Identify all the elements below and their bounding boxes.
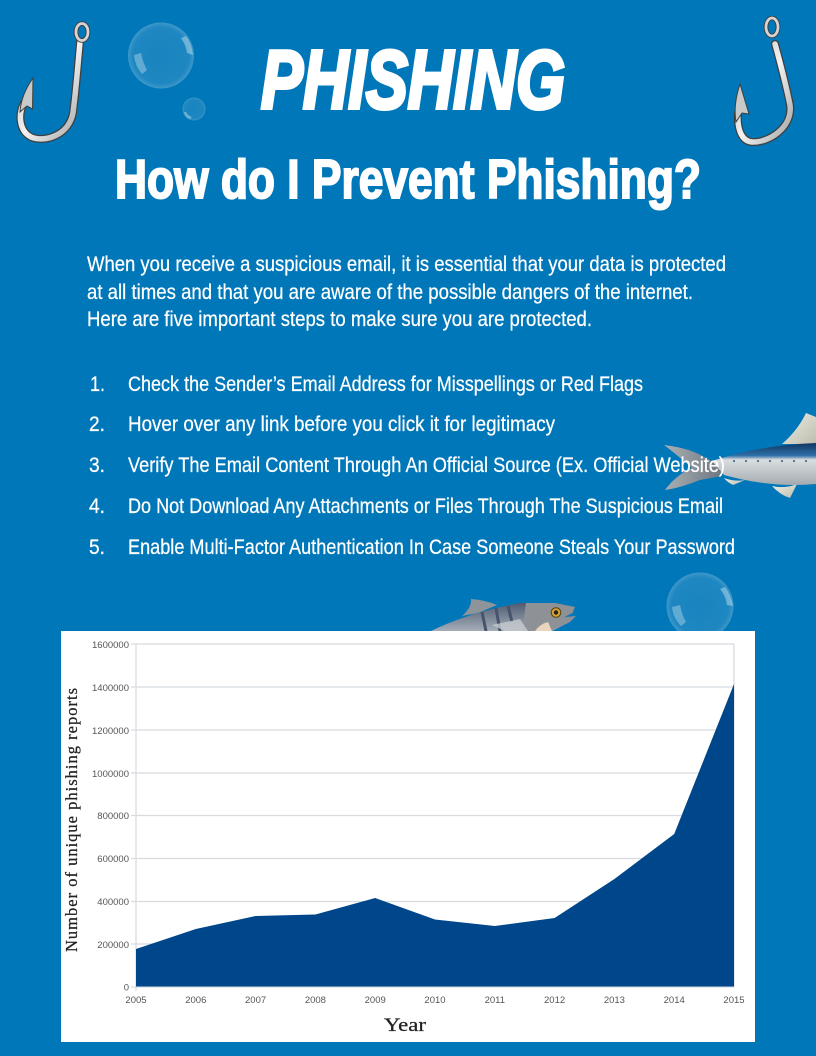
intro text block xyxy=(87,252,726,331)
numbered list: Verify The Email Content Through An Official Source (Ex. Official Website) xyxy=(128,453,725,477)
x axis tick labels: 2013 xyxy=(604,995,625,1006)
y axis tick labels: 200000 xyxy=(97,940,129,951)
axis baseline xyxy=(131,986,734,988)
x axis tick labels: 2012 xyxy=(544,995,565,1006)
icon: small bubble top xyxy=(182,98,206,120)
icon: left fish hook xyxy=(20,24,88,139)
x axis tick labels: 2011 xyxy=(485,995,505,1006)
x axis tick labels xyxy=(125,995,745,1006)
panel: chart of phishing reports xyxy=(61,631,755,1042)
numbered list: 5. xyxy=(89,535,105,559)
x axis tick labels: 2007 xyxy=(245,995,266,1006)
x axis tick labels: 2005 xyxy=(125,995,147,1006)
icon: right fish hook xyxy=(735,18,790,142)
numbered list: 3. xyxy=(89,453,105,477)
y axis tick labels: 800000 xyxy=(97,811,129,822)
intro text block: at all times and that you are aware of the possible dangers of the internet. xyxy=(87,280,693,304)
area series xyxy=(136,684,734,987)
y axis tick labels: 0 xyxy=(124,982,129,994)
y axis tick labels: 600000 xyxy=(97,854,129,865)
x axis tick labels: 2015 xyxy=(723,995,745,1006)
y axis tick labels: 1000000 xyxy=(92,769,129,780)
numbered list xyxy=(89,372,735,559)
y axis tick labels: 1400000 xyxy=(92,683,129,694)
x axis tick labels: 2006 xyxy=(185,995,206,1006)
numbered list: 1. xyxy=(90,372,105,396)
y axis tick labels: 400000 xyxy=(97,897,129,908)
x axis tick labels: 2008 xyxy=(305,995,326,1006)
numbered list: Hover over any link before you click it for legitimacy xyxy=(128,412,555,436)
numbered list: 4. xyxy=(89,494,105,518)
plot frame and gridlines xyxy=(131,644,734,991)
intro text block: When you receive a suspicious email, it is essential that your data is protected xyxy=(87,252,726,276)
illustration: mackerel fish above chart xyxy=(431,599,576,631)
title: PHISHING xyxy=(261,33,565,126)
y axis tick labels: 1200000 xyxy=(92,726,129,737)
y axis title: Number of unique phishing reports xyxy=(62,688,81,952)
x axis title: Year xyxy=(384,1015,427,1036)
x axis tick labels: 2010 xyxy=(424,995,446,1006)
y axis tick labels xyxy=(92,640,129,994)
icon: large bubble top xyxy=(128,22,194,88)
numbered list: Check the Sender’s Email Address for Misspellings or Red Flags xyxy=(128,372,643,396)
numbered list: 2. xyxy=(89,412,105,436)
illustration: sardine fish at right edge xyxy=(664,413,816,498)
numbered list: Do Not Download Any Attachments or Files Through The Suspicious Email xyxy=(128,494,723,518)
x axis tick labels: 2009 xyxy=(365,995,386,1006)
intro text block: Here are five important steps to make sure you are protected. xyxy=(87,307,592,331)
icon: bubble above chart xyxy=(666,572,734,640)
y axis tick labels: 1600000 xyxy=(92,640,129,651)
x axis tick labels: 2014 xyxy=(664,995,685,1006)
